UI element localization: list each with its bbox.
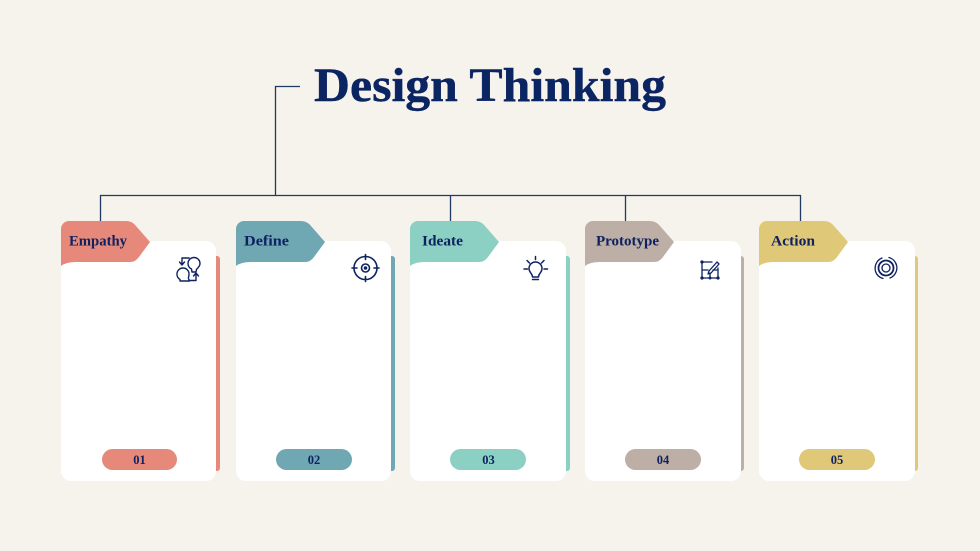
heading: Ideate (422, 234, 463, 250)
number pill (102, 449, 177, 470)
connector lines (100, 86, 800, 221)
number pill (276, 449, 352, 470)
icon: circular gear (875, 258, 897, 278)
panel: Empathy (61, 221, 220, 481)
card body (759, 241, 915, 481)
icon: light bulb (524, 256, 548, 280)
icon: target (352, 254, 379, 282)
heading: Action (771, 234, 816, 250)
card body (61, 241, 216, 481)
card body (236, 241, 391, 481)
tab (759, 221, 848, 266)
tab (410, 221, 499, 266)
card body (410, 241, 566, 481)
side accent bar (560, 256, 570, 471)
tab (61, 221, 150, 266)
heading: Define (244, 234, 289, 250)
title: Design Thinking (314, 60, 666, 112)
panel: Define (236, 221, 395, 481)
side accent bar (210, 256, 220, 471)
number pill: 02 (308, 453, 320, 467)
tab (236, 221, 325, 266)
icon: grid with pencil (701, 261, 719, 279)
number pill: 03 (482, 453, 495, 467)
number pill: 05 (831, 453, 843, 467)
number pill: 04 (657, 453, 670, 467)
heading: Empathy (69, 234, 127, 250)
heading: Prototype (596, 234, 659, 250)
panel: Ideate (410, 221, 570, 481)
side accent bar (909, 256, 918, 471)
card body (585, 241, 741, 481)
panel: Action (759, 221, 918, 481)
number pill (625, 449, 701, 470)
side accent bar (385, 256, 395, 471)
number pill (450, 449, 526, 470)
side accent bar (735, 256, 744, 471)
icon: two heads exchanging ideas (177, 258, 200, 281)
panel: Prototype (585, 221, 744, 481)
tab (585, 221, 674, 266)
number pill: 01 (133, 453, 146, 467)
number pill (799, 449, 875, 470)
